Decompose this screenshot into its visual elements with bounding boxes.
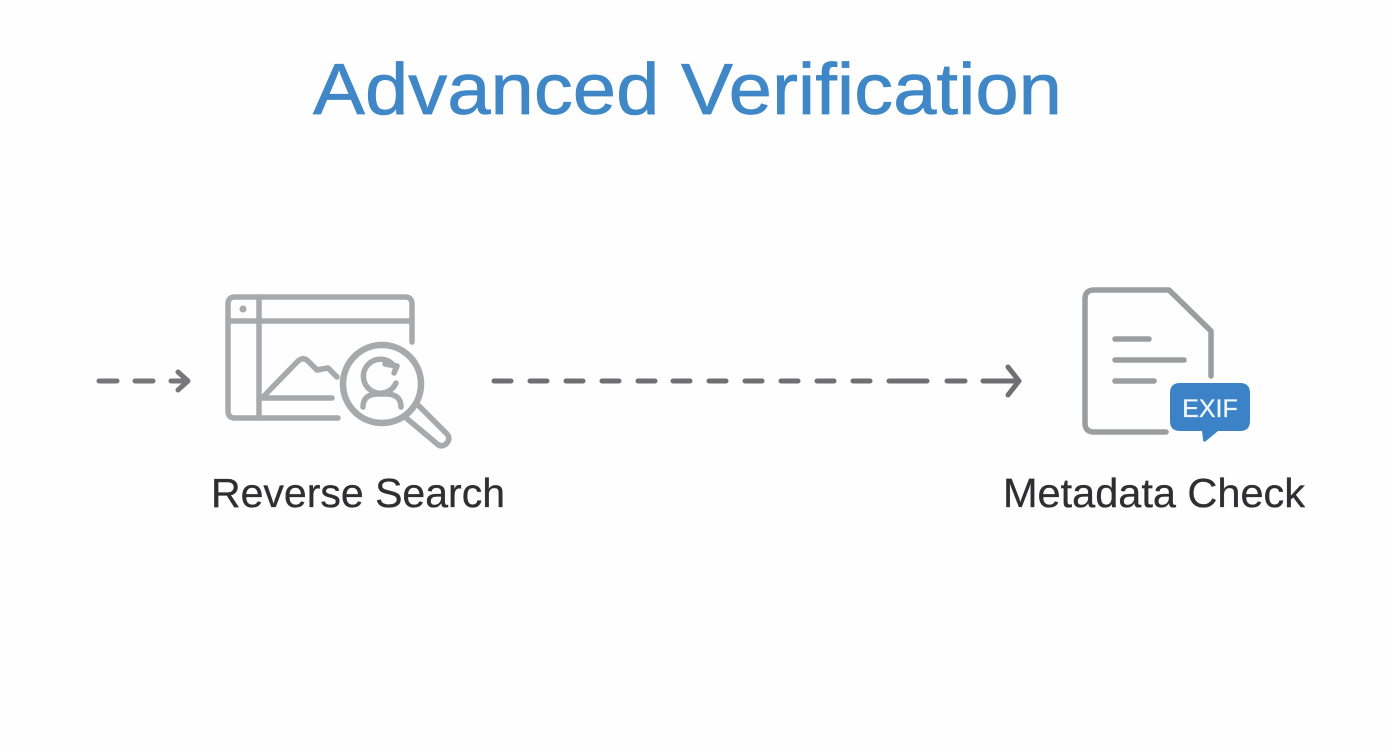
icon detail: person in lens bbox=[363, 359, 401, 407]
icon detail: mountain picture bbox=[263, 359, 337, 398]
title: Advanced Verification bbox=[313, 50, 1062, 130]
icon: reverse image search bbox=[228, 297, 449, 446]
document outline and text lines bbox=[1085, 290, 1211, 432]
icon detail: magnifying glass bbox=[343, 345, 449, 446]
label: Metadata Check: Metadata Check bbox=[1003, 470, 1305, 516]
badge: EXIF speech bubble bbox=[1170, 383, 1250, 442]
arrow: dashed entry arrow bbox=[99, 372, 188, 390]
label: Reverse Search: Reverse Search bbox=[211, 470, 505, 516]
badge: EXIF speech bubble: EXIF bbox=[1182, 395, 1238, 423]
arrow: dashed connector arrow bbox=[494, 367, 1019, 395]
icon: metadata document bbox=[1085, 290, 1250, 442]
